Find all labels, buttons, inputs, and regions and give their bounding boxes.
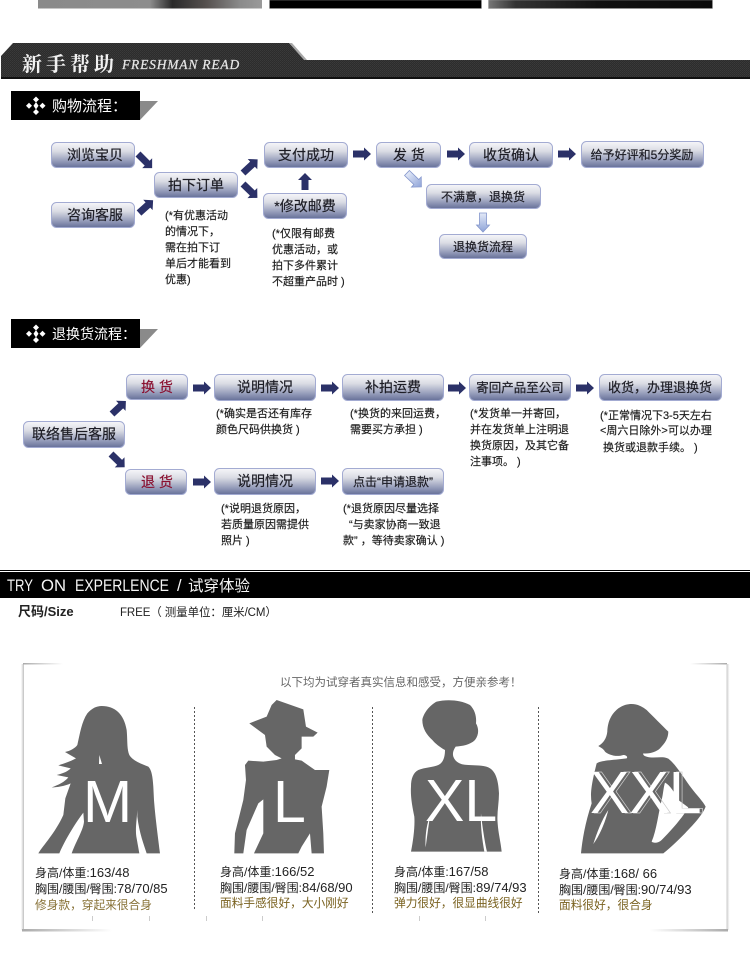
- step: confirm receipt: [470, 142, 552, 168]
- arrow: explain to freight: [321, 382, 339, 394]
- figure: size M: [35, 706, 168, 912]
- step: ship: 发 货: [393, 147, 425, 163]
- silhouette XXL: [581, 704, 706, 853]
- step: place order: 拍下订单: [168, 177, 224, 193]
- note: shipping: 优惠活动，或: [272, 242, 338, 256]
- arrow: confirm to review: [558, 148, 576, 160]
- stats L: 胸围/腰围/臀围:84/68/90: [220, 880, 353, 895]
- icon: diamond cross: [26, 96, 46, 115]
- banner title english: FRESHMAN READ: [121, 57, 240, 72]
- band: try on experience: EXPERLENCE: [75, 577, 169, 595]
- step: pay freight: [342, 374, 444, 400]
- arrow: change shipping to pay: [298, 173, 312, 190]
- note: freight: (*换货的来回运费，: [350, 406, 446, 420]
- letter XXL ghost: XXL: [593, 760, 705, 826]
- section banner: freshman read: [1, 43, 750, 79]
- comment XL: 弹力很好，很显曲线很好: [394, 896, 523, 910]
- step: consult: 咨询客服: [67, 207, 123, 223]
- top photo strip: [38, 0, 712, 8]
- heading: shopping process: [11, 91, 158, 120]
- step: good review: [582, 142, 704, 168]
- step: unsatisfied: [426, 184, 540, 208]
- figure: size XXL: [559, 704, 706, 912]
- step: confirm receipt: 收货确认: [483, 147, 539, 163]
- heading background: [11, 91, 140, 120]
- note: delivery slip: 并在发货单上注明退: [470, 422, 569, 436]
- heading corner triangle: [140, 101, 158, 120]
- note: check stock: (*确实是否还有库存: [216, 406, 312, 420]
- band: try on experience: ON: [41, 577, 66, 595]
- arrow: unsatisfied to return process: [476, 213, 490, 232]
- hair gap: [99, 755, 102, 764]
- note: delivery slip: (*发货单一并寄回，: [470, 406, 566, 420]
- figure: size L: [220, 700, 353, 910]
- note: refund reason: 若质量原因需提供: [221, 517, 309, 531]
- step: pay success: 支付成功: [278, 147, 334, 163]
- step: refund: 退 货: [141, 474, 173, 490]
- step: request refund: [342, 468, 444, 494]
- note: discount: (*有优惠活动: [165, 208, 228, 222]
- banner shape: [1, 43, 750, 79]
- step: change shipping: *修改邮费: [274, 198, 336, 214]
- step: return process: 退换货流程: [453, 239, 513, 254]
- note: discount: 优惠): [165, 272, 191, 286]
- banner bevel: [289, 43, 307, 60]
- letter L: L: [273, 769, 306, 835]
- stats XXL: 身高/体重:168/ 66: [559, 866, 657, 881]
- arrow: to exchange: [107, 396, 131, 419]
- step: return process: [440, 234, 526, 258]
- silhouette M: [38, 706, 160, 853]
- heading text: 购物流程：: [52, 98, 127, 115]
- step: consult: [52, 202, 134, 228]
- step: send back: 寄回产品至公司: [476, 380, 564, 395]
- silhouette L: [234, 700, 329, 853]
- step: pay freight: 补拍运费: [365, 379, 421, 395]
- banner title chinese: 新手帮助: [22, 48, 118, 77]
- stats XL: 身高/体重:167/58: [394, 864, 488, 879]
- photo: middle: [270, 0, 482, 8]
- stats L: 身高/体重:166/52: [220, 864, 314, 879]
- arrow: send back to receive: [576, 382, 594, 394]
- arrow: order to change shipping: [238, 179, 262, 203]
- step: explain refund: 说明情况: [237, 473, 293, 489]
- photo: left: [38, 0, 262, 8]
- letter M: M: [83, 769, 132, 835]
- comment XXL: 面料很好，很合身: [559, 898, 653, 912]
- banner bottom edge: [1, 77, 750, 79]
- step: browse: [52, 142, 134, 168]
- note: refund option: (*退货原因尽量选择: [343, 501, 439, 515]
- heading background: [11, 319, 140, 348]
- step: ship: [376, 142, 440, 168]
- band: try on experience: [0, 570, 750, 598]
- note: shipping: 不超重产品时 ): [272, 274, 345, 288]
- arrow: refund to explain: [193, 476, 211, 488]
- size label: 尺码/Size: [18, 604, 74, 619]
- arrow: order to pay: [238, 154, 262, 178]
- step: send back: [470, 374, 570, 400]
- step: change shipping: [264, 194, 346, 218]
- step: good review: 给予好评和5分奖励: [591, 148, 693, 162]
- note: refund reason: (*说明退货原因，: [221, 501, 306, 515]
- step: explain exchange: [214, 374, 316, 400]
- letter XL: XL: [425, 768, 497, 834]
- stats XXL: 胸围/腰围/臀围:90/74/93: [559, 882, 692, 897]
- note: processing time: 换货或退款手续。 ): [603, 440, 698, 454]
- panel: try-on card: [21, 663, 730, 932]
- band: try on experience: /: [177, 577, 182, 595]
- arrow: to refund: [106, 449, 130, 472]
- step: contact service: 联络售后客服: [32, 426, 116, 442]
- comment L: 面料手感很好，大小刚好: [220, 896, 349, 910]
- note: refund option: 款” ，等待卖家确认 ): [343, 533, 444, 547]
- note: shipping: 拍下多件累计: [272, 258, 338, 272]
- arrow: ship to confirm: [447, 148, 465, 160]
- photo: right: [488, 0, 712, 8]
- step: pay success: [264, 142, 348, 168]
- heading corner triangle: [140, 329, 158, 348]
- arrow: pay to ship: [353, 148, 371, 160]
- note: refund option: “与卖家协商一致退: [349, 517, 441, 531]
- note: check stock: 颜色尺码供换货 ): [216, 422, 300, 436]
- step: exchange: 换 货: [141, 379, 173, 395]
- band: try on experience: TRY: [7, 577, 33, 595]
- step: exchange: [126, 374, 188, 400]
- note: delivery slip: 注事项。 ): [470, 454, 521, 468]
- note: discount: 需在拍下订: [165, 240, 220, 254]
- figure: size XL: [394, 700, 527, 910]
- dividers: [194, 707, 538, 914]
- arrow: freight to send back: [448, 382, 466, 394]
- arrow: exchange to explain: [193, 382, 211, 394]
- heading: return process: [11, 319, 158, 348]
- step: explain exchange: 说明情况: [237, 379, 293, 395]
- size row: [18, 604, 277, 619]
- step: refund: [126, 470, 186, 494]
- arrow: explain to request: [321, 474, 339, 488]
- band: try on experience: 试穿体验: [188, 577, 251, 595]
- letter XXL: XXL: [590, 760, 702, 826]
- step: receive and process: [600, 374, 722, 400]
- heading text: 退换货流程：: [52, 326, 136, 342]
- step: contact service: [24, 422, 124, 448]
- step: browse: 浏览宝贝: [67, 147, 123, 163]
- flow: return process: [24, 374, 722, 547]
- note: discount: 单后才能看到: [165, 256, 231, 270]
- comment M: 修身款，穿起来很合身: [35, 898, 152, 912]
- note: freight: 需要买方承担 ): [350, 422, 423, 436]
- arrow: ship to unsatisfied: [402, 168, 426, 192]
- stats XL: 胸围/腰围/臀围:89/74/93: [394, 880, 527, 895]
- note: delivery slip: 换货原因，及其它备: [470, 438, 569, 452]
- flow: shopping process: [52, 142, 704, 288]
- arrow: consult to order: [134, 195, 158, 218]
- note: processing time: (*正常情况下3-5天左右: [600, 408, 712, 422]
- stats M: 身高/体重:163/48: [35, 865, 129, 880]
- step: place order: [154, 172, 238, 198]
- silhouette XL: [411, 700, 502, 852]
- card intro: 以下均为试穿者真实信息和感受，方便亲参考！: [280, 675, 522, 689]
- step: request refund: 点击“申请退款”: [353, 475, 433, 489]
- step: receive and process: 收货，办理退换货: [608, 380, 712, 395]
- note: processing time: <周六日除外>可以办理: [600, 423, 712, 437]
- size value: FREE（ 测量单位：厘米/CM）: [120, 605, 277, 619]
- note: refund reason: 照片 ): [221, 534, 250, 547]
- arrow: browse to order: [133, 149, 157, 173]
- icon: diamond cross: [26, 324, 46, 343]
- stats M: 胸围/腰围/臀围:78/70/85: [35, 881, 168, 896]
- note: shipping: (*仅限有邮费: [272, 226, 335, 240]
- step: unsatisfied: 不满意，退换货: [441, 189, 525, 204]
- note: discount: 的情况下，: [165, 224, 220, 238]
- step: explain refund: [214, 468, 316, 494]
- card shadows: [21, 663, 730, 932]
- arm slits: [426, 813, 487, 852]
